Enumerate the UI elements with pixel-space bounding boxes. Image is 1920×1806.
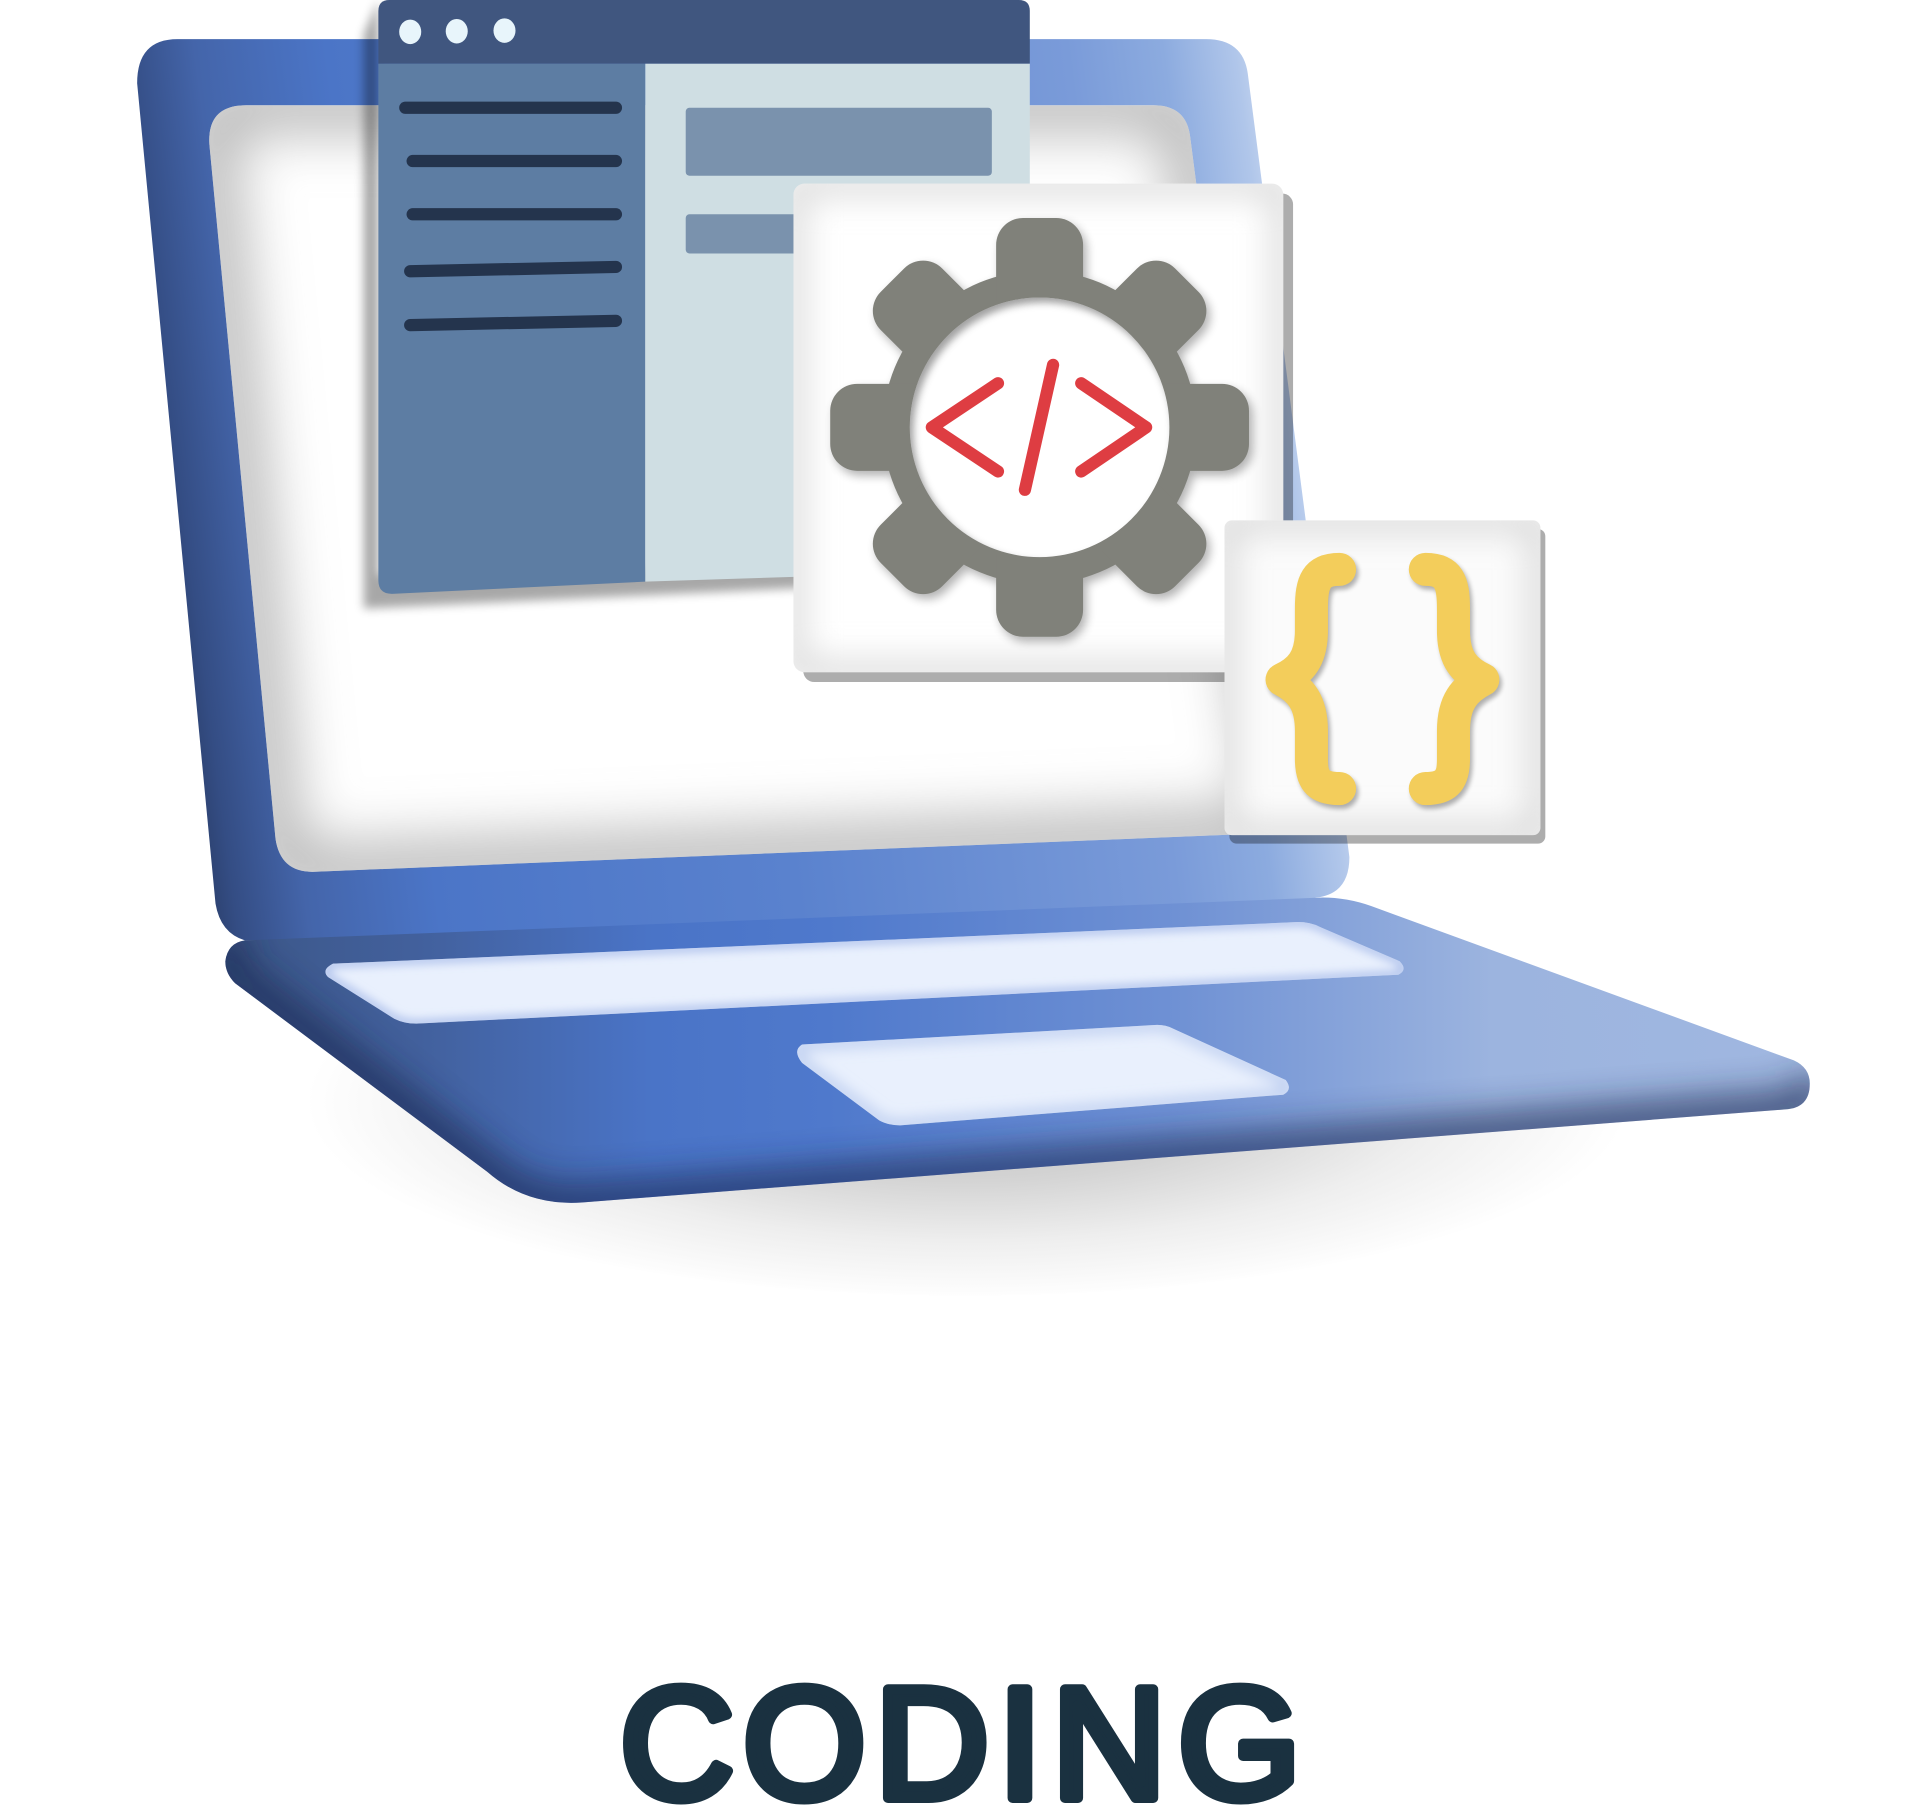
keyboard panel: [325, 922, 1404, 1024]
content block large: [686, 108, 992, 176]
laptop lid: [137, 39, 1349, 940]
card face: [1224, 520, 1540, 835]
lid body: [137, 39, 1349, 940]
lid screen: [209, 105, 1281, 872]
base body: [225, 898, 1810, 1203]
trackpad: [797, 1025, 1289, 1125]
braces card: [1224, 520, 1545, 844]
window control dots: [399, 18, 516, 44]
icon: curly braces: [1282, 569, 1485, 792]
window sidebar: [378, 64, 645, 594]
laptop base: [225, 898, 1810, 1203]
icon: code tag: [932, 365, 1146, 490]
card backing plate: [1229, 529, 1545, 844]
card backing plate: [803, 193, 1293, 682]
content block small: [686, 214, 808, 253]
window shadow: [364, 0, 808, 609]
ground shadow: [306, 909, 1629, 1296]
window content area: [645, 64, 1030, 582]
window header bar: [378, 0, 1030, 64]
sidebar code lines: [405, 108, 616, 325]
card face: [793, 184, 1283, 672]
icon: gear: [830, 218, 1253, 642]
gear card: [793, 184, 1293, 682]
code editor window: [364, 0, 1030, 609]
